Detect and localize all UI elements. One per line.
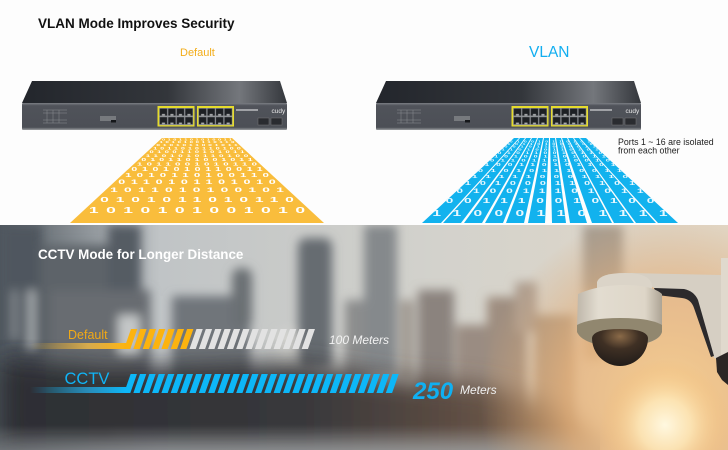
heading: VLAN Mode Improves Security: VLAN Mode Improves Security <box>38 16 235 31</box>
data field: blue isolated binary lanes: 111110001110 <box>472 174 629 179</box>
icon: network switch, default mode: cudy <box>272 108 286 115</box>
page background <box>0 0 728 225</box>
data field: yellow binary stream: 1010100110110 <box>159 141 235 144</box>
data field: blue isolated binary lanes: 010010110101 <box>510 140 591 143</box>
data field: blue isolated binary lanes: 010110010110 <box>498 151 602 155</box>
data field: blue isolated binary lanes: 100110101101 <box>485 163 616 167</box>
white segments <box>189 329 315 349</box>
bar: default range 100 meters <box>30 328 315 349</box>
value: 250 Meters: 250 <box>412 378 454 405</box>
data field: blue isolated binary lanes: 101001101011 <box>494 155 606 159</box>
label: CCTV range: CCTV <box>64 370 109 388</box>
bar: CCTV range 250 meters <box>30 370 399 393</box>
orange segments <box>124 329 193 349</box>
data field: yellow binary stream: 1010101001010 <box>89 206 306 215</box>
data field: blue isolated binary lanes: 010101110011 <box>478 168 622 173</box>
data field: blue isolated binary lanes: 001110010100 <box>446 197 654 205</box>
label: Default range: Default <box>68 328 108 342</box>
panel: blurred city photo background <box>0 225 728 450</box>
data field: yellow binary stream: 1010110100110 <box>125 172 269 178</box>
icon: network switch, default mode <box>22 81 287 130</box>
data field: blue isolated binary lanes: 101101001100 <box>507 142 593 146</box>
label: Default: Default <box>180 47 215 59</box>
data field: blue isolated binary lanes: 011011010010 <box>490 159 611 163</box>
data field: yellow binary stream: 0101011010110 <box>100 195 294 204</box>
icon: network switch, VLAN mode: cudy <box>626 108 640 115</box>
data field: yellow binary stream: 0101010110011 <box>131 167 263 172</box>
data field: yellow binary stream: 0101101010011 <box>162 138 233 141</box>
value: 250 Meters: Meters <box>460 383 497 397</box>
value: 250 Meters <box>412 378 497 405</box>
data field: blue isolated binary lanes: 110100110101 <box>501 148 599 152</box>
data field: yellow binary stream: 1011010100101 <box>110 186 284 194</box>
data field: yellow binary stream: 0100110101011 <box>149 151 245 154</box>
note: ports isolated: from each other <box>618 146 680 156</box>
data field: blue isolated binary lanes: 110001101111 <box>432 209 668 218</box>
data field: yellow binary stream <box>70 138 324 223</box>
data field: blue isolated binary lanes: 101000110101 <box>465 180 636 186</box>
note: ports isolated: Ports 1 ~ 16 are isolated <box>618 137 714 147</box>
value: 100 Meters: 100 Meters <box>329 333 389 347</box>
data field: yellow binary stream: 0110101101010 <box>118 179 276 186</box>
data field: yellow binary stream: 1011010110100 <box>153 147 241 151</box>
data field: yellow binary stream: 1101010110100 <box>146 154 249 158</box>
heading: CCTV Mode for Longer Distance: CCTV Mode for Longer Distance <box>38 247 243 262</box>
data field: yellow binary stream: 1011001010110 <box>137 161 257 167</box>
data field: blue isolated binary lanes <box>422 138 678 223</box>
icon: dome CCTV camera on wall arm <box>577 258 728 385</box>
blue segments <box>124 374 399 393</box>
data field: yellow binary stream: 0101101001011 <box>141 158 253 162</box>
data field: blue isolated binary lanes: 001011010011 <box>504 145 596 148</box>
icon: network switch, VLAN mode <box>376 81 641 130</box>
data field: blue isolated binary lanes: 010011101011 <box>456 188 644 195</box>
label: VLAN: VLAN <box>529 44 570 61</box>
data field: yellow binary stream: 0101011001011 <box>156 144 238 147</box>
